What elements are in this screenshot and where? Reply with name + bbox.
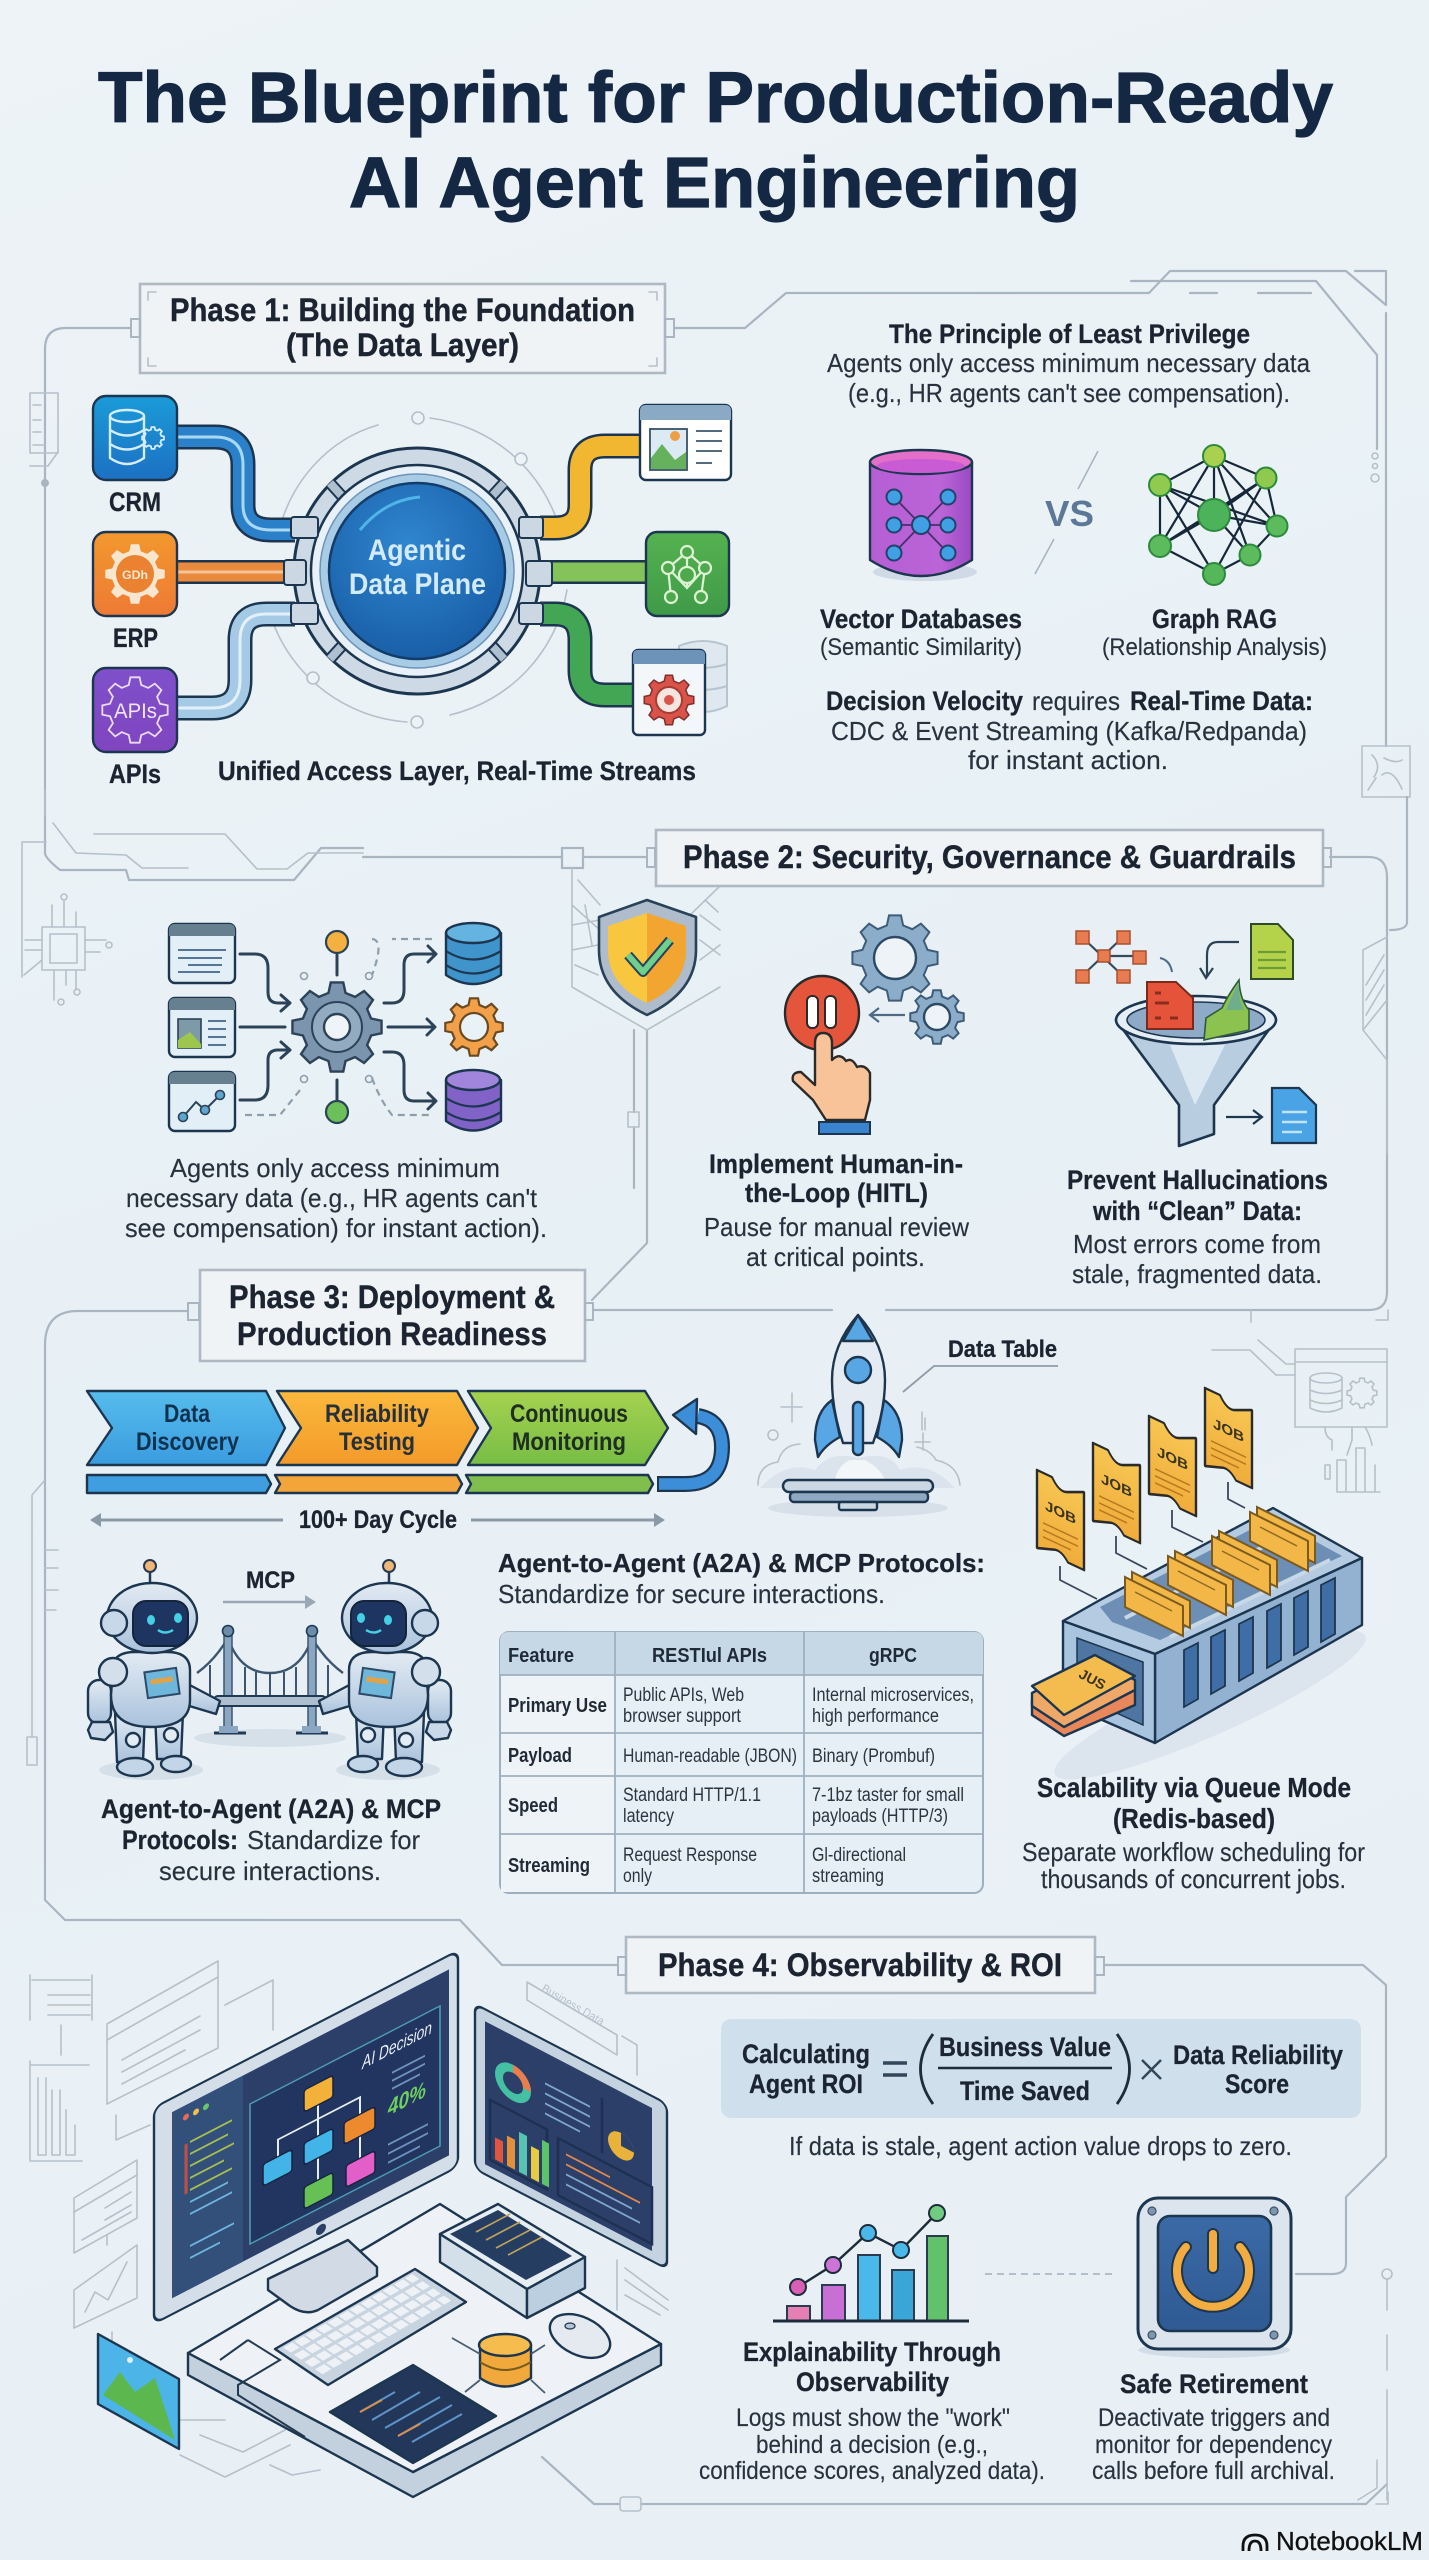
phase 1 heading: Phase 1: Building the Foundation [170,292,635,328]
APIs label: APIs [109,759,161,789]
A2A caption [101,1794,441,1886]
data table: streaming [812,1866,884,1887]
icon: CRM [93,396,177,480]
access text [125,1153,547,1243]
ticket connectors [1060,1482,1245,1599]
HITL text: the-Loop (HITL) [745,1178,928,1208]
base plate [188,2204,661,2497]
decision velocity text: Decision Velocity [826,686,1023,716]
safe retirement text: calls before full archival. [1092,2457,1335,2485]
robots and bridge [88,1560,451,1780]
chevron: reliability testing [277,1391,478,1465]
data table: Public APIs, Web [623,1685,744,1706]
progress bars [87,1475,653,1493]
main monitor: AI Decision [361,2018,432,2074]
graph RAG label: Graph RAG [1152,604,1277,634]
job stack: JUS [1076,1665,1109,1693]
explainability text: behind a decision (e.g., [756,2431,988,2459]
data table: Streaming [508,1855,590,1877]
icon: browser gear with cylinder [633,641,727,735]
computer workstation [98,1951,667,2497]
icon: browser image [640,405,731,480]
cables [220,2340,305,2437]
VS divider [1035,451,1098,574]
gold database [452,2334,545,2393]
chevron: continuous monitoring: Monitoring [512,1428,626,1456]
arrows [240,939,436,1115]
data table: Payload [508,1745,572,1767]
ticket 2 [1093,1443,1140,1543]
icon: loop arrow [657,1399,722,1484]
ticket 3: JOB [1157,1444,1188,1474]
hub [294,448,540,694]
least privilege text [827,319,1310,408]
explainability text: confidence scores, analyzed data). [699,2457,1045,2485]
center gear [292,982,382,1072]
decorative side panel [30,393,58,815]
icon: human in the loop [785,915,964,1134]
vector databases label: (Semantic Similarity) [820,634,1022,661]
data table: RESTIul APIs [652,1645,767,1667]
icon: graph tile [646,532,729,616]
chevron: data discovery [87,1391,285,1465]
scalability text: Scalability via Queue Mode [1037,1772,1351,1803]
access flow diagram [169,923,503,1131]
HITL text: at critical points. [746,1242,925,1272]
ROI formula: Data Reliability [1173,2040,1343,2070]
ticket 1: JOB [1045,1498,1076,1528]
data table: Request Response [623,1845,757,1866]
ticket 3 [1149,1416,1196,1516]
chevron: reliability testing: Reliability [325,1400,429,1428]
scalability text: thousands of concurrent jobs. [1041,1864,1346,1894]
ROI formula [721,2019,1361,2118]
access text: Agents only access minimum [170,1153,500,1183]
data table: Primary Use [508,1695,607,1717]
ERP label: ERP [113,623,158,653]
image tile [98,2334,179,2449]
icon: shield [599,900,696,1015]
A2A table heading: Standardize for secure interactions. [498,1579,885,1609]
hub: Data Plane [349,568,486,601]
phase 3 heading: Production Readiness [237,1316,547,1352]
safe retirement text: Safe Retirement [1120,2369,1308,2399]
data table [500,1632,983,1893]
chevron: data discovery: Data [164,1400,211,1428]
A2A caption: secure interactions. [159,1856,381,1886]
decision velocity text: CDC & Event Streaming (Kafka/Redpanda) [831,716,1307,746]
vector databases label: Vector Databases [820,604,1022,634]
A2A caption: Protocols: [122,1825,238,1855]
data table: Human-readable (JBON) [623,1746,797,1767]
chevron: data discovery: Discovery [136,1428,239,1456]
A2A table heading [498,1548,985,1609]
A2A caption: Agent-to-Agent (A2A) & MCP [101,1794,441,1824]
keyboard [275,2269,466,2385]
decorative chip [24,894,112,1005]
cycle label [90,1506,665,1534]
graph RAG label: (Relationship Analysis) [1102,634,1327,661]
HITL text: Implement Human-in- [709,1149,963,1179]
A2A caption: Standardize for [247,1825,420,1855]
phase 4 heading [618,1937,1104,1993]
ticket 1 [1037,1470,1084,1570]
hallucinations text: stale, fragmented data. [1072,1259,1322,1289]
decision velocity text: for instant action. [968,745,1168,775]
title: AI Agent Engineering [349,144,1080,223]
browser icons [169,924,235,1131]
phase 3 heading [188,1270,593,1361]
safe retirement text: Deactivate triggers and [1098,2404,1330,2432]
ROI formula: Score [1225,2069,1289,2099]
icon: APIs: APIs [114,700,157,723]
data plane diagram [93,396,731,789]
scalability text: Separate workflow scheduling for [1022,1837,1365,1867]
icon: rocket [758,1315,960,1517]
least privilege text: (e.g., HR agents can't see compensation). [848,378,1290,408]
icon: ERP [93,532,177,616]
data table: Feature [508,1645,574,1667]
data table: only [623,1866,652,1887]
data table: Internal microservices, [812,1685,974,1706]
safe retirement text: monitor for dependency [1095,2431,1332,2459]
tablet [330,2365,496,2463]
ticket 2: JOB [1101,1471,1132,1501]
ticket 4 [1205,1388,1252,1488]
hallucinations text [1067,1165,1328,1289]
hallucinations text: Prevent Hallucinations [1067,1165,1328,1195]
title [98,59,1334,223]
icon: queue machine [1032,1507,1378,1802]
least privilege text: The Principle of Least Privilege [889,319,1250,349]
data table label [903,1336,1058,1392]
hallucinations text: with “Clean” Data: [1092,1196,1302,1226]
data table: browser support [623,1706,742,1727]
NotebookLM logo: NotebookLM [1276,2526,1423,2556]
mini computer [440,2204,585,2318]
CRM label: CRM [109,487,161,517]
phase 1 heading [131,284,674,373]
ticket 4: JOB [1213,1416,1244,1446]
data table: gRPC [869,1645,917,1667]
icon: bar chart [773,2205,969,2321]
ROI formula: Calculating [742,2039,870,2069]
phase 3 heading: Phase 3: Deployment & [229,1279,555,1315]
decorative database window [1212,1340,1387,1492]
phase 4 heading: Phase 4: Observability & ROI [658,1947,1062,1983]
data layer caption: Unified Access Layer, Real-Time Streams [218,756,696,786]
pipes [177,437,648,708]
data table: Binary (Prombuf) [812,1746,935,1767]
process chevrons [87,1391,722,1534]
pipe connectors [284,517,552,624]
chevron: continuous monitoring [468,1391,668,1465]
A2A table heading: Agent-to-Agent (A2A) & MCP Protocols: [498,1548,985,1578]
data table: latency [623,1806,674,1827]
VS divider: VS [1045,493,1094,534]
phase 1 heading: (The Data Layer) [286,327,519,363]
data table: Gl-directional [812,1845,906,1866]
explainability text: Observability [796,2367,949,2397]
HITL text: Pause for manual review [704,1212,969,1242]
data table: Standard HTTP/1.1 [623,1785,761,1806]
inner tickets [1125,1507,1315,1636]
title: The Blueprint for Production-Ready [98,59,1334,138]
main monitor: 40% [387,2076,426,2121]
graph RAG label [1102,604,1327,661]
data table: 7-1bz taster for small [812,1785,964,1806]
explainability text [699,2337,1045,2485]
decorative sketches: Business Data [539,1981,607,2029]
icon: vector database cylinder [870,450,977,581]
decorative sketches [30,1961,668,2477]
safe retirement text [1092,2369,1335,2485]
orbit arcs [272,412,567,728]
scalability text [1022,1772,1365,1894]
icon: graph network [1149,445,1288,585]
job tickets [1037,1388,1252,1599]
monitor stand [268,2240,377,2312]
machine slots [1184,1578,1335,1707]
MCP arrow: MCP [246,1567,295,1594]
job stack [1032,1655,1135,1736]
access text: see compensation) for instant action). [125,1213,547,1243]
access text: necessary data (e.g., HR agents can't [126,1183,538,1213]
HITL text [704,1149,969,1272]
data table: Speed [508,1795,558,1817]
hallucinations text: Most errors come from [1073,1229,1321,1259]
nodes [326,931,348,1123]
icon: power button [1138,2198,1291,2358]
decision velocity text [826,686,1313,775]
main monitor [154,1951,458,2324]
icon: ERP: GDh [122,568,148,582]
data table label: Data Table [948,1336,1057,1363]
vector databases label [820,604,1022,661]
explainability text: Logs must show the "work" [736,2404,1010,2432]
decision velocity text: Real-Time Data: [1130,686,1313,716]
left robot [88,1560,220,1780]
ROI formula: Agent ROI [749,2069,863,2099]
icon: data funnel [1076,924,1316,1146]
chevron: reliability testing: Testing [339,1428,415,1456]
data table: payloads (HTTP/3) [812,1806,948,1827]
MCP arrow [223,1567,316,1609]
decision velocity text: requires [1032,686,1120,716]
stale data note: If data is stale, agent action value drops to zero. [789,2131,1292,2161]
icon: APIs [93,668,177,752]
cycle label: 100+ Day Cycle [299,1506,457,1534]
hub: Agentic [368,534,466,567]
data table: high performance [812,1706,939,1727]
bridge [194,1626,346,1747]
ROI formula: Business Value [939,2032,1111,2062]
right robot [319,1560,451,1780]
explainability text: Explainability Through [743,2337,1001,2367]
chevron: continuous monitoring: Continuous [510,1400,628,1428]
database icons [445,923,503,1130]
ROI formula: Time Saved [960,2076,1090,2106]
least privilege text: Agents only access minimum necessary data [827,348,1310,378]
mouse [543,2305,617,2367]
scalability text: (Redis-based) [1113,1803,1275,1834]
second monitor [475,2004,667,2269]
phase 2 heading: Phase 2: Security, Governance & Guardrails [683,839,1296,875]
phase 2 heading [647,830,1331,886]
